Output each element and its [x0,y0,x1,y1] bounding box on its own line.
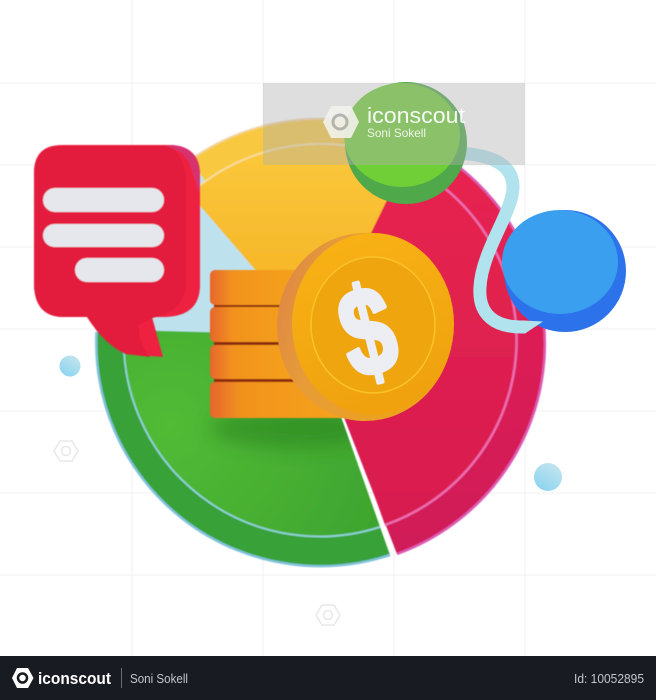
inner green rim [124,330,380,537]
coin 1 [210,270,310,305]
coin stack [210,270,350,418]
small watermark bottom [316,605,340,625]
watermark logo [323,106,359,138]
watermark author: Soni Sokell [367,126,426,140]
text bar 1 [43,188,164,212]
footer divider [121,668,122,688]
inner red slice [319,163,517,525]
watermark name: iconscout [367,103,465,128]
node face [344,83,460,187]
footer logo [12,668,34,688]
node face [502,210,618,314]
footer brand: iconscout [38,669,111,688]
inner green slice [124,330,380,537]
outer yellow slice [190,119,425,340]
tube body [450,153,525,327]
coin 2 [210,307,310,342]
speech bubble [34,145,200,357]
outer light blue slice [96,160,320,340]
inner yellow slice [192,144,405,345]
dark gaps [214,300,314,386]
text bar 2 [43,224,164,247]
inner yellow rim [192,144,405,192]
footer author: Soni Sokell [130,671,188,686]
bubble top right edge [165,145,200,195]
outer red slice [314,145,545,554]
bubble side [34,145,200,357]
shadow under coins [210,418,350,454]
pie chart [96,119,545,566]
dollar sign: $ [326,259,410,406]
outer green rim [96,332,390,566]
inner ring [311,257,435,393]
coin 3 [210,345,310,379]
node side [504,210,626,332]
decorative dot left [60,356,80,376]
decorative dot right [534,463,562,491]
small watermark left [54,441,78,461]
green node [344,82,467,204]
text bar 3 [75,258,164,282]
coin face [292,233,454,415]
grey band [263,83,525,165]
node side [345,82,467,204]
connector tube [450,153,543,334]
watermark panel [263,83,525,165]
footer background [0,656,656,700]
outer yellow rim [190,119,425,160]
big dollar coin [277,233,454,421]
coin 4 [210,382,350,418]
inner light blue slice [118,200,320,340]
blue node [502,210,626,332]
bubble face [34,146,186,357]
inner red rim [385,163,517,525]
tube tip [524,320,543,334]
outer green slice [96,332,390,566]
outer red rim [397,145,545,554]
footer bar [0,656,656,700]
footer id: Id: 10052895 [574,671,644,686]
coin edge [277,233,453,421]
